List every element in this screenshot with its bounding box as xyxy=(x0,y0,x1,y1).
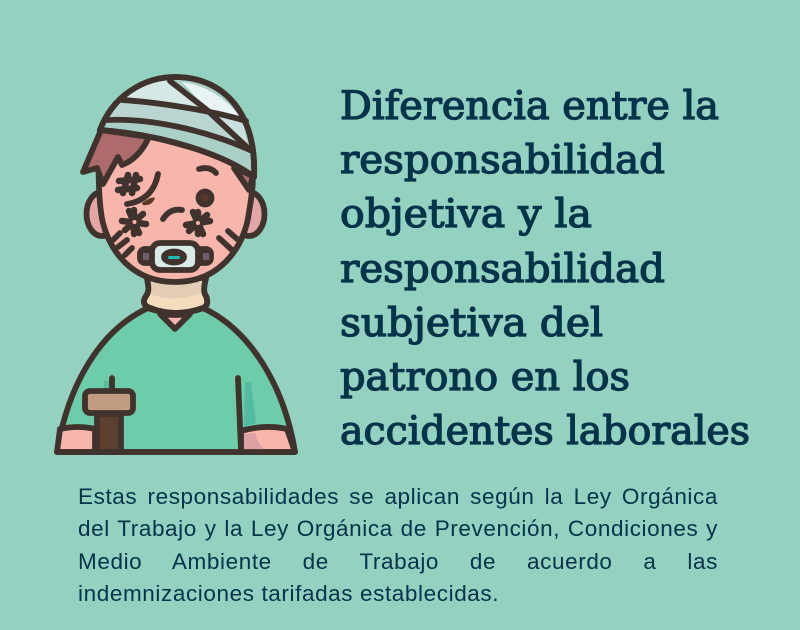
neck xyxy=(144,278,207,313)
title: subjetiva del xyxy=(340,301,603,346)
body with green shirt xyxy=(57,308,295,452)
title: patrono en los xyxy=(340,355,630,400)
title: responsabilidad xyxy=(340,138,665,183)
body paragraph xyxy=(78,484,718,606)
scratches left xyxy=(113,233,132,255)
right eye xyxy=(198,192,212,204)
body paragraph: Medio Ambiente de Trabajo de acuerdo a las xyxy=(78,549,718,574)
scratches right xyxy=(219,231,237,250)
body paragraph: indemnizaciones tarifadas establecidas. xyxy=(78,581,499,606)
collar xyxy=(160,314,190,329)
title: accidentes laborales xyxy=(340,409,750,454)
asterisk wound right xyxy=(186,212,210,234)
title: objetiva y la xyxy=(340,192,592,237)
body paragraph: del Trabajo y la Ley Orgánica de Prevención, Condiciones y xyxy=(78,516,718,541)
eyebrow xyxy=(199,168,216,173)
title xyxy=(340,84,750,454)
bandage xyxy=(100,77,254,177)
base line xyxy=(57,449,295,455)
title: Diferencia entre la xyxy=(340,84,719,129)
title: responsabilidad xyxy=(340,247,665,292)
asterisk wound left xyxy=(122,210,146,234)
nose xyxy=(163,210,182,219)
gavel xyxy=(85,378,133,452)
hair xyxy=(83,130,149,184)
illustration: injured worker xyxy=(57,77,295,452)
swollen eye xyxy=(127,174,158,205)
body paragraph: Estas responsabilidades se aplican según la Ley Orgánica xyxy=(78,484,718,509)
mouth guard xyxy=(140,243,211,270)
right hair xyxy=(234,168,253,190)
ears xyxy=(86,192,264,236)
hash wound xyxy=(118,175,140,193)
face xyxy=(99,130,253,282)
